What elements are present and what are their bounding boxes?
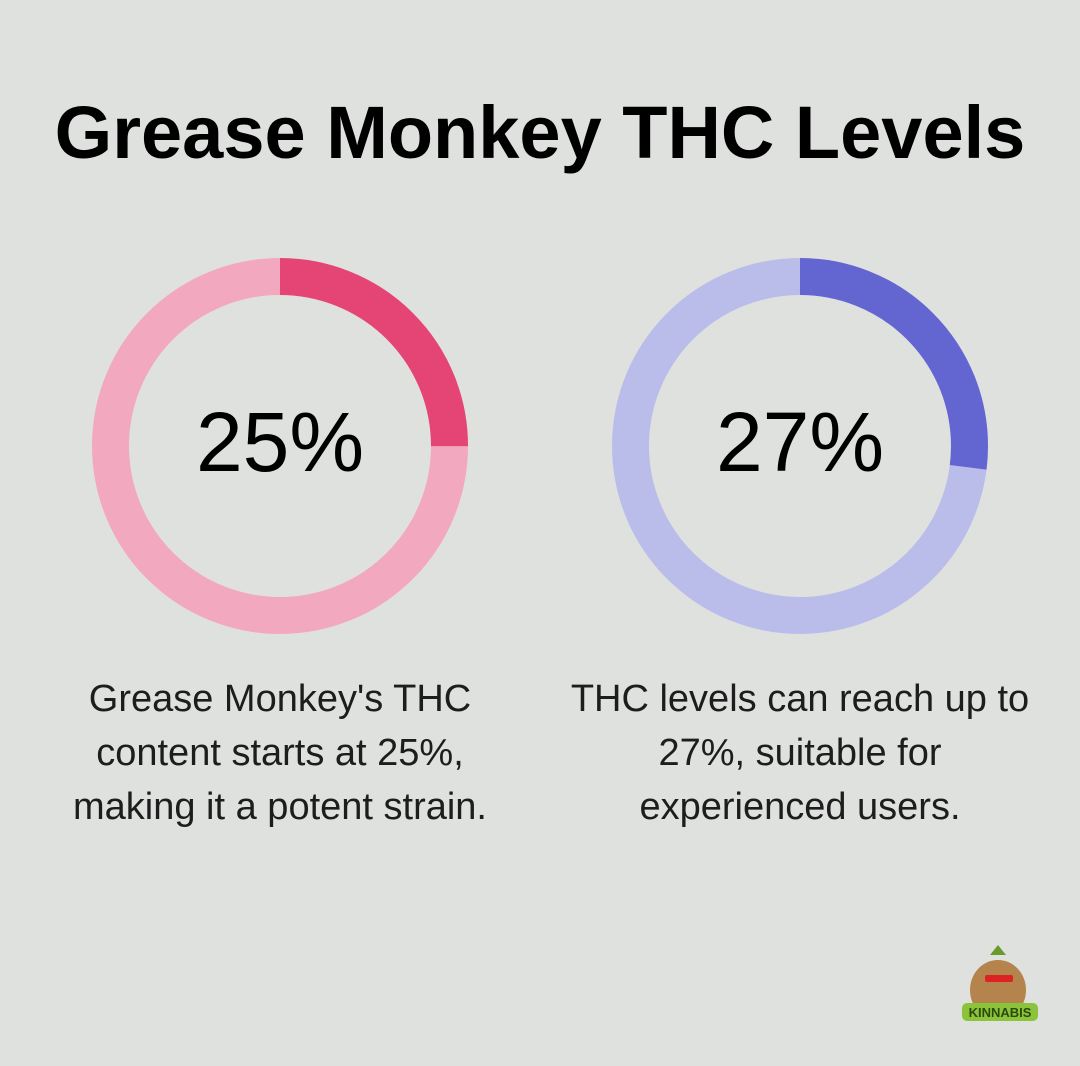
caption left: making it a potent strain. <box>73 786 487 828</box>
icon: logo: KINNABIS <box>969 1005 1032 1020</box>
caption right <box>571 678 1029 828</box>
donut: 25% <box>110 276 450 616</box>
caption right: THC levels can reach up to <box>571 678 1029 720</box>
title: Grease Monkey THC Levels <box>55 91 1025 174</box>
caption right: experienced users. <box>639 786 961 828</box>
caption left: content starts at 25%, <box>96 732 464 774</box>
icon: logo <box>962 945 1038 1021</box>
donut: 27%: 27% <box>716 395 884 489</box>
caption left <box>73 678 487 828</box>
donut: 25%: 25% <box>196 395 364 489</box>
caption left: Grease Monkey's THC <box>89 678 471 720</box>
caption right: 27%, suitable for <box>658 732 942 774</box>
donut: 27% <box>630 276 970 616</box>
